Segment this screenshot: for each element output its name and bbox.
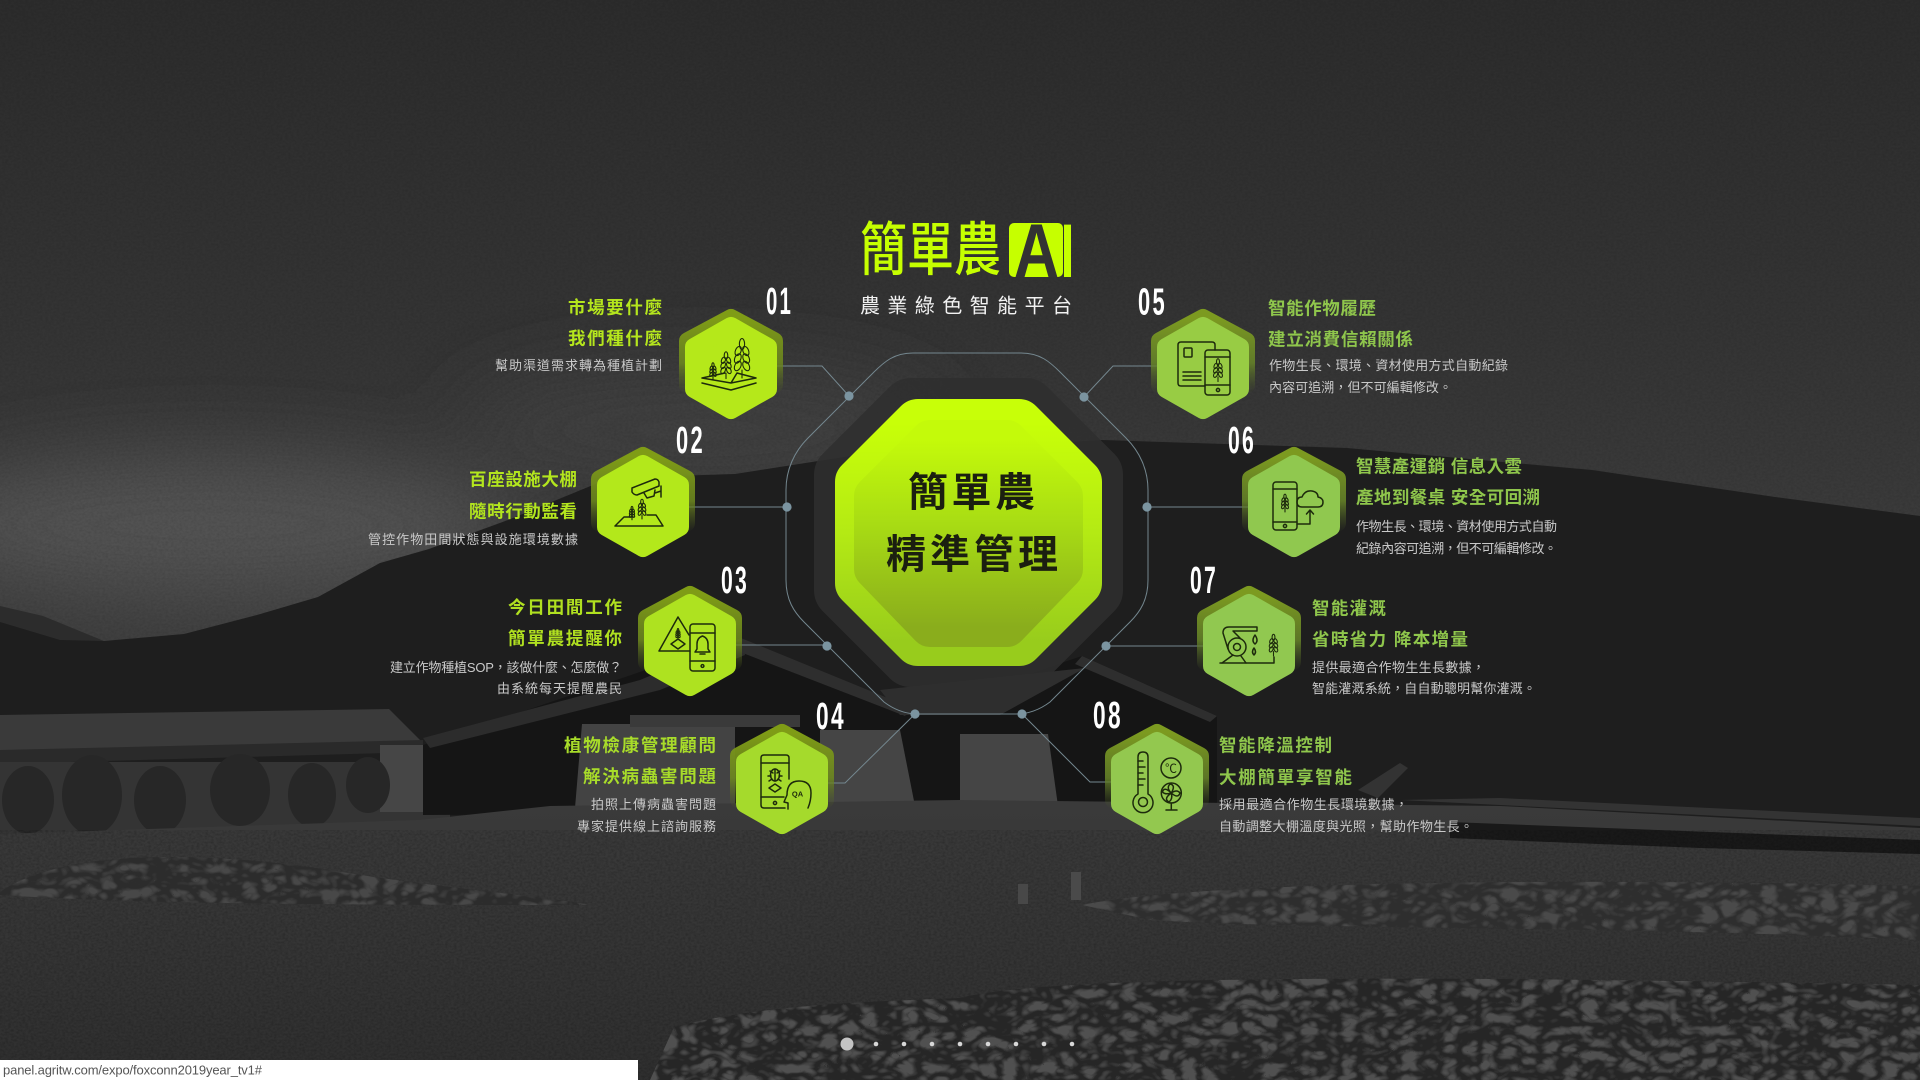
panel: central octagon	[844, 408, 1093, 657]
heading 08	[1219, 736, 1352, 788]
description 07	[1312, 660, 1536, 696]
description 04: 專家提供線上諮詢服務	[577, 819, 716, 834]
description 06: 作物生長、環境、資材使用方式自動	[1356, 519, 1557, 534]
panel: item 06	[1228, 420, 1557, 556]
hexagon badge 01	[688, 318, 774, 410]
hexagon badge 05	[1160, 318, 1246, 410]
panel: item 01	[495, 281, 793, 410]
heading 02: 隨時行動監看	[469, 502, 577, 522]
description 06	[1356, 519, 1557, 556]
browser status bar with url: panel.agritw.com/expo/foxconn2019year_tv1#	[3, 1062, 263, 1078]
number 03: 03	[721, 560, 749, 602]
description 03: 由系統每天提醒農民	[497, 681, 622, 696]
description 03: 建立作物種植SOP，該做什麼、怎麼做？	[390, 660, 622, 675]
panel: item 03	[390, 560, 749, 696]
heading 06: 產地到餐桌 安全可回溯	[1356, 488, 1540, 508]
description 05	[1269, 358, 1508, 395]
heading 02: 百座設施大棚	[469, 470, 577, 490]
pagination dots	[840, 1038, 1074, 1050]
icon: wheat on field	[702, 338, 756, 390]
description 03	[390, 660, 622, 696]
browser status bar with url	[0, 1060, 638, 1080]
title: 簡單農 AI logo	[860, 209, 1074, 294]
title: 簡單農 AI logo: 簡單農	[860, 218, 1001, 283]
hexagon badge 08	[1114, 733, 1200, 825]
panel: item 02	[368, 420, 705, 548]
description 07: 提供最適合作物生生長數據，	[1312, 660, 1485, 675]
description 04: 拍照上傳病蟲害問題	[591, 797, 716, 812]
heading 01	[568, 298, 662, 348]
icon: record card and phone	[1178, 342, 1230, 395]
heading 07: 智能灌溉	[1312, 598, 1386, 618]
heading 05	[1268, 298, 1413, 350]
description 08: 採用最適合作物生長環境數據，	[1219, 797, 1408, 812]
heading 02	[469, 470, 577, 522]
icon: phone uploading to cloud	[1273, 482, 1323, 530]
heading 03	[508, 598, 622, 648]
heading 06	[1356, 456, 1540, 508]
number 06: 06	[1228, 420, 1256, 462]
subtitle: 農業綠色智能平台: 農業綠色智能平台	[860, 294, 1072, 318]
center title text: 精準管理	[886, 533, 1058, 577]
heading 03: 今日田間工作	[508, 598, 622, 618]
number 05: 05	[1138, 282, 1167, 324]
heading 01: 我們種什麼	[568, 328, 662, 348]
panel: item 07	[1190, 560, 1536, 696]
description 05: 內容可追溯，但不可編輯修改。	[1269, 380, 1452, 395]
description 08: 自動調整大棚溫度與光照，幫助作物生長。	[1219, 819, 1473, 834]
icon: thermometer, celsius and fan: ℃	[1165, 762, 1177, 776]
heading 07: 省時省力 降本增量	[1312, 630, 1468, 650]
description 07: 智能灌溉系統，自自動聰明幫你灌溉。	[1312, 681, 1536, 696]
description 01: 幫助渠道需求轉為種植計劃	[495, 358, 662, 373]
number 07: 07	[1190, 560, 1218, 602]
panel: item 04	[564, 696, 846, 834]
background: dark monochrome landscape photo	[0, 326, 1920, 1080]
number 02: 02	[676, 420, 705, 462]
number 04: 04	[816, 696, 846, 738]
hexagon badge 07	[1206, 595, 1292, 687]
heading 04: 植物檢康管理顧問	[564, 736, 716, 756]
description 06: 紀錄內容可追溯，但不可編輯修改。	[1356, 541, 1557, 556]
icon: phone with bug and QA head: QA	[792, 790, 804, 798]
heading 03: 簡單農提醒你	[508, 628, 622, 648]
heading 04	[564, 736, 716, 786]
icon: warning triangle and phone with bell	[659, 617, 715, 671]
number 01: 01	[766, 281, 793, 323]
hexagon badge 04	[739, 733, 825, 825]
center title text: 簡單農	[908, 471, 1035, 515]
heading 08: 大棚簡單享智能	[1219, 768, 1352, 788]
title: 簡單農 AI logo: I	[1061, 209, 1074, 294]
center title text	[886, 471, 1058, 577]
heading 05: 智能作物履歷	[1268, 298, 1376, 318]
heading 04: 解決病蟲害問題	[583, 766, 716, 786]
heading 07	[1312, 598, 1468, 650]
panel: item 08	[1093, 695, 1473, 834]
hexagon badge 06	[1251, 456, 1337, 548]
icon: irrigation machine and wheat	[1220, 627, 1278, 663]
hexagon badge 02	[600, 456, 686, 548]
description 08	[1219, 797, 1473, 834]
title: 簡單農 AI logo: A	[1014, 209, 1059, 294]
heading 08: 智能降溫控制	[1219, 736, 1332, 756]
icon: camera over field	[615, 479, 663, 526]
heading 05: 建立消費信賴關係	[1268, 330, 1413, 350]
description 04	[577, 797, 716, 834]
network lines and nodes around the center	[689, 353, 1248, 783]
panel: item 05	[1138, 282, 1508, 410]
description 05: 作物生長、環境、資材使用方式自動紀錄	[1269, 358, 1508, 373]
heading 01: 市場要什麼	[568, 298, 662, 318]
number 08: 08	[1093, 695, 1123, 737]
hexagon badge 03	[647, 595, 733, 687]
description 02: 管控作物田間狀態與設施環境數據	[368, 532, 578, 547]
heading 06: 智慧產運銷 信息入雲	[1356, 456, 1522, 476]
